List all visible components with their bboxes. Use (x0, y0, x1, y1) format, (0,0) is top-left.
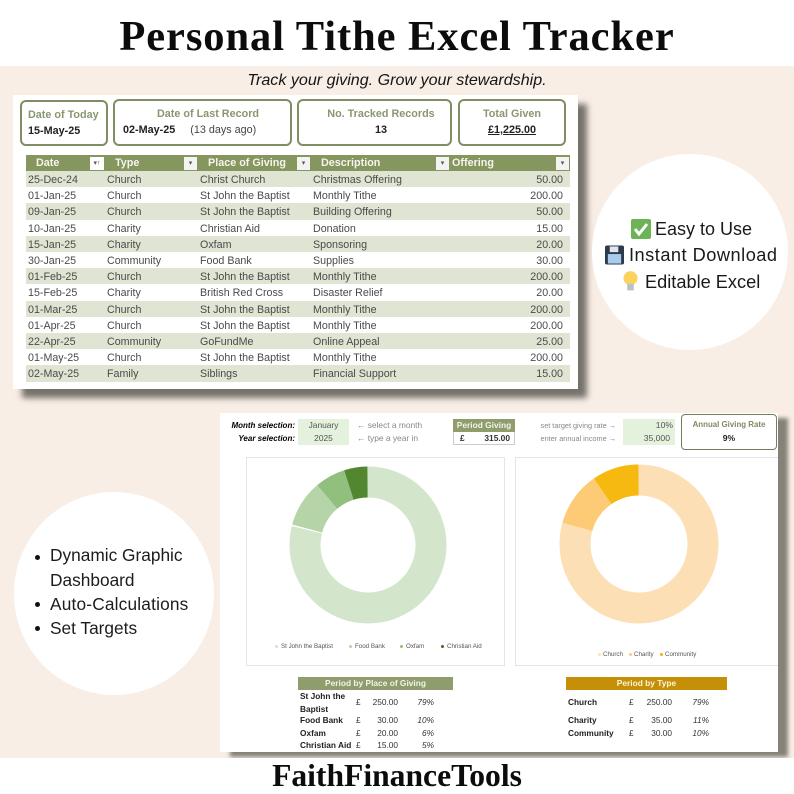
period giving: 315.00 (484, 433, 510, 443)
KPI: total given: £1,225.00 (488, 124, 536, 136)
feature: instant download: Instant Download (629, 245, 778, 265)
table header: ▾ (441, 160, 444, 167)
legend: Oxfam (406, 643, 424, 650)
table rows: British Red Cross (200, 287, 283, 299)
feature: easy to use: Easy to Use (655, 219, 752, 239)
table rows: 200.00 (530, 352, 563, 364)
table: period by type: 79% (692, 697, 709, 707)
table rows: 200.00 (530, 320, 563, 332)
legend (275, 643, 482, 650)
table: period by place of giving: Period by Place of Giving (325, 678, 426, 688)
table rows: Christian Aid (200, 223, 260, 235)
table rows: Family (107, 368, 138, 380)
table: period by place of giving: 5% (422, 740, 434, 750)
icon: floppy disk (605, 246, 624, 264)
table rows: Church (107, 174, 141, 186)
table rows: Christ Church (200, 174, 265, 186)
month selection control: Month selection: (231, 421, 295, 430)
table header: Date (36, 157, 59, 169)
table rows: 200.00 (530, 271, 563, 283)
table rows: 01-May-25 (28, 352, 79, 364)
table rows: 50.00 (536, 174, 563, 186)
target giving rate control (540, 419, 675, 432)
table rows: St John the Baptist (200, 352, 290, 364)
table rows: Donation (313, 223, 356, 235)
table rows: Monthly Tithe (313, 304, 377, 316)
bullet list (35, 545, 188, 638)
KPI: tracked records (297, 99, 452, 146)
table: period by type: Period by Type (617, 678, 676, 688)
table header: ▾↑ (93, 160, 100, 167)
table rows (26, 171, 570, 382)
table: period by place of giving: Baptist (300, 704, 328, 714)
bottom white band (0, 758, 794, 794)
table rows: 200.00 (530, 190, 563, 202)
table rows: St John the Baptist (200, 320, 290, 332)
table: period by type: 35.00 (651, 715, 672, 725)
year selection control (238, 432, 418, 445)
legend: St John the Baptist (281, 643, 333, 650)
month selection control: ← select a month (357, 420, 422, 430)
table: period by type: 11% (693, 715, 709, 725)
tagline: Track your giving. Grow your stewardship. (247, 71, 547, 89)
legend: Community (665, 651, 696, 658)
table rows: Community (107, 255, 161, 267)
KPI: date of today: 15-May-25 (28, 125, 80, 137)
table rows: GoFundMe (200, 336, 253, 348)
table rows: 01-Feb-25 (28, 271, 77, 283)
table header (26, 155, 570, 171)
table: period by type: Charity (568, 715, 597, 725)
legend: Church (603, 651, 623, 658)
table rows: 200.00 (530, 304, 563, 316)
KPI: date of last record: Date of Last Record (157, 108, 259, 120)
table rows: Monthly Tithe (313, 320, 377, 332)
table: period by place of giving: 6% (422, 728, 434, 738)
table rows: Community (107, 336, 161, 348)
table rows: 50.00 (536, 206, 563, 218)
panel: dashboard features circle (14, 492, 214, 695)
table: period by place of giving: Oxfam (300, 728, 326, 738)
year selection control: ← type a year in (357, 433, 418, 443)
table rows: 15.00 (536, 368, 563, 380)
icon: check mark (631, 219, 651, 239)
annual giving rate card: 9% (723, 433, 735, 443)
table: period by place of giving: £ (356, 715, 361, 725)
table header: ▾ (302, 160, 305, 167)
table: period by place of giving (298, 677, 453, 750)
panel: tracker table (13, 95, 578, 389)
table: period by place of giving: 30.00 (377, 715, 398, 725)
KPI: total given: Total Given (483, 108, 541, 120)
feature: editable excel: Editable Excel (645, 272, 760, 292)
table rows: Siblings (200, 368, 237, 380)
period giving: £ (460, 433, 465, 443)
year selection control: Year selection: (238, 434, 295, 443)
table rows: Charity (107, 287, 141, 299)
table: period by place of giving: 79% (417, 697, 434, 707)
table: period by type: 250.00 (647, 697, 672, 707)
table rows: Online Appeal (313, 336, 380, 348)
table rows: Disaster Relief (313, 287, 382, 299)
table rows: 30.00 (536, 255, 563, 267)
table rows: Monthly Tithe (313, 271, 377, 283)
target giving rate control: set target giving rate → (541, 421, 616, 430)
annual income control: 35,000 (644, 433, 670, 443)
month selection control: January (309, 420, 338, 430)
table: period by place of giving: £ (356, 740, 361, 750)
table: period by type: 30.00 (651, 728, 672, 738)
table rows: Financial Support (313, 368, 396, 380)
table rows: Church (107, 271, 141, 283)
table rows: Charity (107, 223, 141, 235)
table rows: Church (107, 320, 141, 332)
table: period by place of giving: £ (356, 728, 361, 738)
table rows: Christmas Offering (313, 174, 402, 186)
table rows: 10-Jan-25 (28, 223, 76, 235)
table rows: 15-Jan-25 (28, 239, 76, 251)
table rows: Church (107, 304, 141, 316)
table: period by type: Church (568, 697, 597, 707)
table: period by place of giving: 20.00 (377, 728, 398, 738)
table rows: 25.00 (536, 336, 563, 348)
table: period by type: Community (568, 728, 614, 738)
table: period by place of giving: £ (356, 697, 361, 707)
legend: Food Bank (355, 643, 385, 650)
table rows: 15-Feb-25 (28, 287, 77, 299)
annual giving rate card (681, 414, 777, 450)
panel: features circle (592, 154, 788, 350)
table rows: 22-Apr-25 (28, 336, 76, 348)
table rows: Monthly Tithe (313, 352, 377, 364)
chart: giving type donut (515, 457, 778, 666)
table rows: Church (107, 352, 141, 364)
KPI: date of today (20, 100, 108, 146)
table header: Offering (452, 157, 494, 169)
table rows: 20.00 (536, 287, 563, 299)
table rows: 09-Jan-25 (28, 206, 76, 218)
bullet list: Set Targets (50, 618, 137, 638)
table: period by type: £ (629, 697, 634, 707)
table rows: Food Bank (200, 255, 252, 267)
table rows: Oxfam (200, 239, 231, 251)
KPI: tracked records: No. Tracked Records (327, 108, 435, 120)
table rows: 25-Dec-24 (28, 174, 78, 186)
table rows: Supplies (313, 255, 354, 267)
table header: ▾ (561, 160, 564, 167)
table rows: St John the Baptist (200, 304, 290, 316)
legend (598, 651, 696, 658)
table rows: 01-Mar-25 (28, 304, 77, 316)
legend: Christian Aid (447, 643, 482, 650)
month selection control (231, 419, 422, 432)
table header: Type (115, 157, 139, 169)
target giving rate control: 10% (656, 420, 673, 430)
table rows: 15.00 (536, 223, 563, 235)
table: period by type: £ (629, 715, 634, 725)
table header: Description (321, 157, 380, 169)
KPI: date of last record (113, 99, 292, 146)
table rows: Building Offering (313, 206, 392, 218)
table: period by type: £ (629, 728, 634, 738)
KPI: tracked records: 13 (375, 124, 387, 136)
period giving (453, 419, 515, 445)
table: period by place of giving: Food Bank (300, 715, 343, 725)
table: period by place of giving: Christian Aid (300, 740, 351, 750)
table: period by place of giving: 10% (417, 715, 434, 725)
title: Personal Tithe Excel Tracker (119, 13, 675, 60)
bullet list: Dynamic Graphic (50, 545, 183, 565)
icon: light bulb (623, 271, 638, 290)
KPI: date of last record: 02-May-25 (13 days ago) (123, 124, 256, 136)
table: period by place of giving: 250.00 (373, 697, 398, 707)
table: period by place of giving: St John the (300, 691, 345, 701)
table header: ▾ (189, 160, 192, 167)
annual giving rate card: Annual Giving Rate (693, 420, 765, 429)
table rows: Charity (107, 239, 141, 251)
chart: place of giving donut (246, 457, 505, 666)
table rows: St John the Baptist (200, 271, 290, 283)
table rows: St John the Baptist (200, 206, 290, 218)
annual income control (540, 432, 675, 445)
bullet list: Dashboard (50, 570, 135, 590)
table rows: 02-May-25 (28, 368, 79, 380)
table rows: Church (107, 206, 141, 218)
table rows: 30-Jan-25 (28, 255, 76, 267)
table header: Place of Giving (208, 157, 286, 169)
legend: Charity (634, 651, 654, 658)
period giving: Period Giving (457, 420, 511, 430)
table rows: 01-Apr-25 (28, 320, 76, 332)
table: period by type: 10% (692, 728, 709, 738)
table: period by type (566, 677, 727, 738)
table rows: Church (107, 190, 141, 202)
table: period by place of giving: 15.00 (377, 740, 398, 750)
bullet list: Auto-Calculations (50, 594, 188, 614)
table rows: Sponsoring (313, 239, 367, 251)
table rows: 20.00 (536, 239, 563, 251)
table rows: 01-Jan-25 (28, 190, 76, 202)
annual income control: enter annual income → (541, 434, 616, 443)
year selection control: 2025 (314, 433, 333, 443)
table rows: St John the Baptist (200, 190, 290, 202)
KPI: total given (458, 99, 566, 146)
panel: dashboard (220, 413, 778, 752)
brand name: FaithFinanceTools (272, 758, 522, 793)
table rows: Monthly Tithe (313, 190, 377, 202)
KPI: date of today: Date of Today (28, 109, 99, 121)
